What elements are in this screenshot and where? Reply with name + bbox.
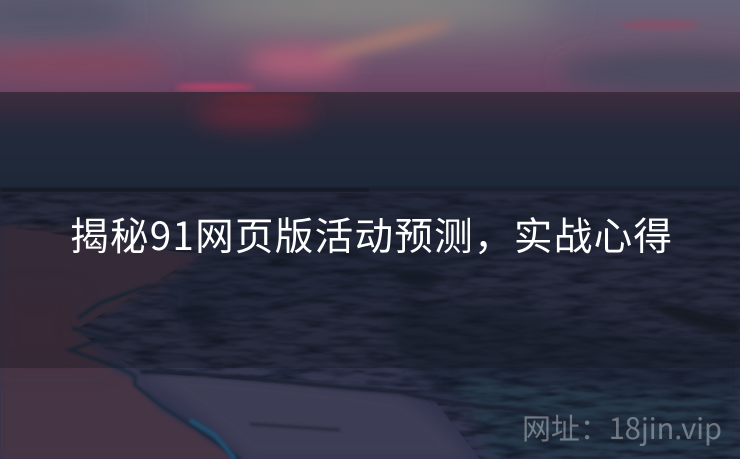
translucent dark overlay band xyxy=(0,92,740,368)
photo background: sunset sky xyxy=(0,0,740,94)
photo background: dark sea band xyxy=(0,92,740,192)
photo background: water and shore xyxy=(0,187,740,459)
title: 揭秘91网页版活动预测，实战心得 xyxy=(70,206,672,262)
water ripple texture xyxy=(0,193,740,459)
watermark URL: 网址：18jin.vip xyxy=(522,406,722,448)
